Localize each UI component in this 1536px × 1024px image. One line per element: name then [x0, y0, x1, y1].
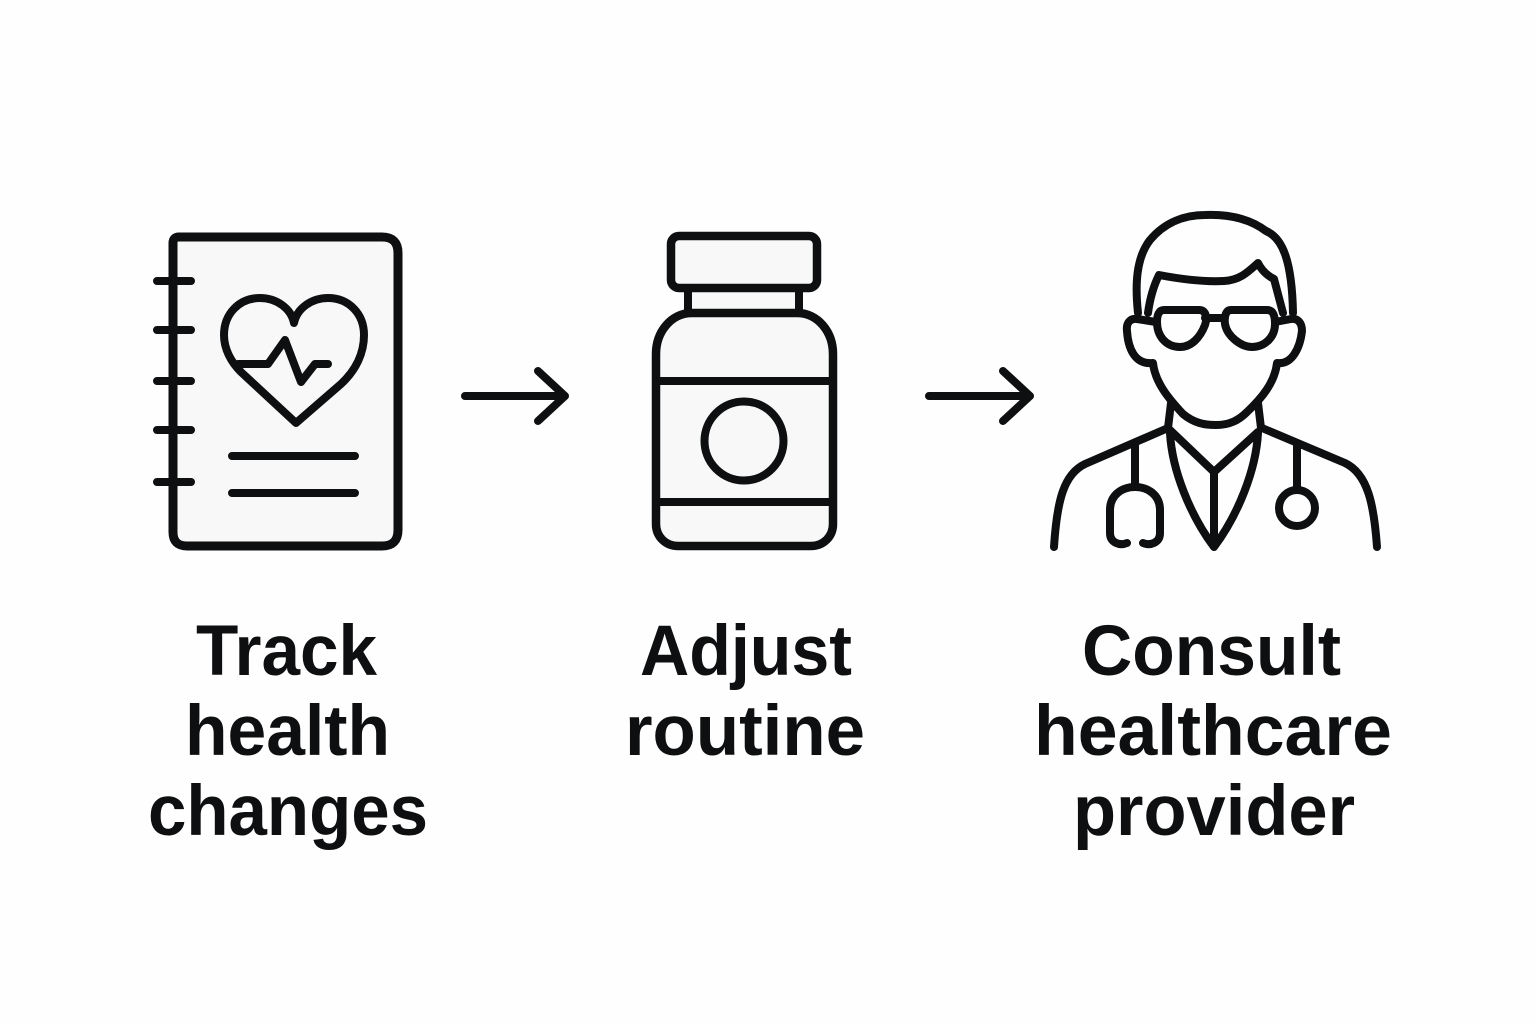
label: adjust routine: routine: [625, 692, 865, 771]
label: track health changes: health: [185, 692, 390, 771]
label: consult healthcare provider: Consult: [1082, 612, 1341, 691]
label: track health changes: [148, 612, 428, 851]
label: consult healthcare provider: [1034, 612, 1392, 851]
label: track health changes: Track: [196, 612, 377, 691]
stethoscope: [1110, 445, 1160, 544]
hair: [1137, 215, 1293, 313]
label: adjust routine: [625, 612, 865, 771]
glasses: [1157, 310, 1206, 347]
icon: doctor: [1054, 215, 1377, 547]
label: consult healthcare provider: healthcare: [1034, 692, 1392, 771]
icon: heart with pulse: [224, 298, 364, 423]
label: adjust routine: Adjust: [640, 612, 852, 691]
face and ears: [1127, 319, 1302, 425]
neck: [1168, 403, 1261, 428]
label: track health changes: changes: [148, 772, 428, 851]
shirt collar and lapels: [1170, 430, 1258, 547]
shoulders: [1054, 428, 1377, 547]
icon: medicine bottle: [656, 236, 833, 546]
arrow: track to adjust: [465, 371, 565, 421]
arrow: adjust to consult: [929, 371, 1030, 421]
icon: health notebook: [157, 237, 398, 546]
label: consult healthcare provider: provider: [1073, 772, 1355, 851]
